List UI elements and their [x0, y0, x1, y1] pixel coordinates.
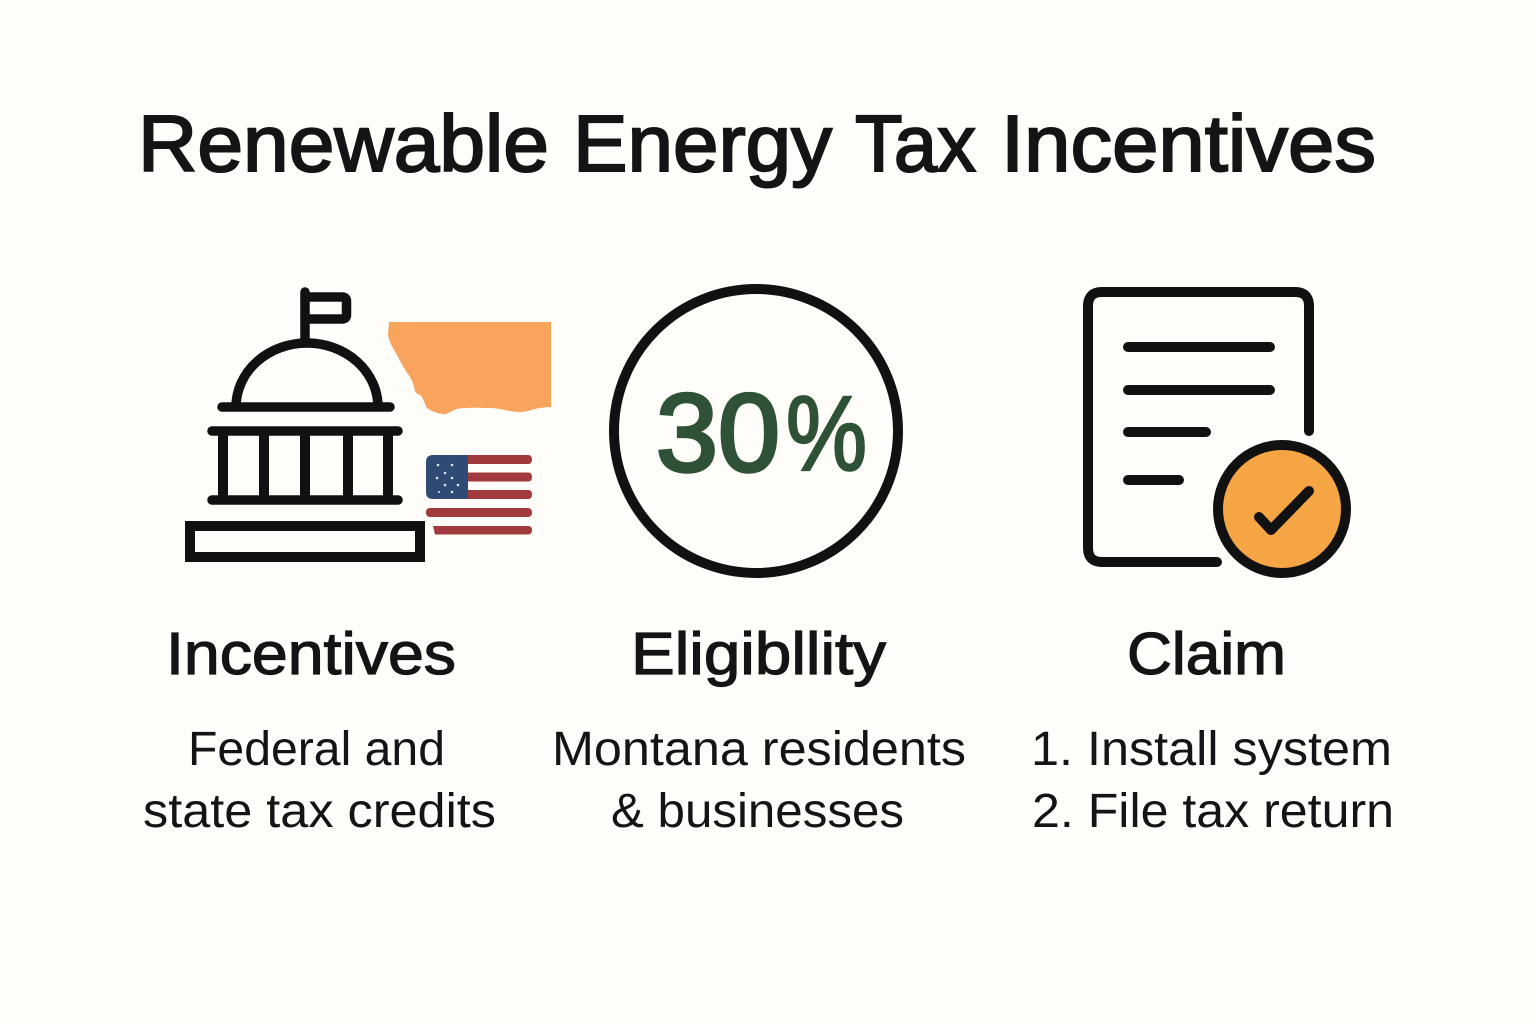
panel: claim	[1031, 292, 1394, 838]
text: claim steps	[1031, 723, 1394, 838]
text: eligibility description: Montana residents	[552, 723, 966, 776]
text: eligibility description: & businesses	[611, 785, 904, 838]
statistic: 30%	[656, 372, 867, 495]
title: Renewable	[138, 99, 549, 188]
icon: capitol building	[190, 292, 420, 557]
icon: 30% circle	[614, 289, 898, 573]
text: claim steps: 2. File tax return	[1032, 785, 1394, 838]
statistic: 30%: 30	[656, 372, 780, 495]
heading: claim: Claim	[1127, 621, 1286, 687]
title: Incentives	[1001, 99, 1376, 188]
title: Energy	[573, 99, 832, 188]
text: incentives description	[143, 723, 496, 838]
text: eligibility description	[552, 723, 966, 838]
text: claim steps: 1. Install system	[1031, 723, 1392, 776]
text: incentives description: Federal and	[188, 723, 445, 776]
icon: American flag	[426, 455, 532, 534]
panel: eligibility	[552, 289, 966, 838]
text: incentives description: state tax credits	[143, 785, 496, 838]
heading: incentives: Incentives	[166, 621, 456, 687]
title: Tax	[855, 99, 976, 188]
title	[138, 99, 1376, 188]
icon: Montana state shape	[388, 322, 551, 414]
statistic: 30%: %	[786, 375, 867, 493]
panel: incentives	[143, 292, 551, 838]
heading: eligibility: Eligibllity	[631, 621, 887, 687]
icon: document with check	[1088, 292, 1346, 573]
